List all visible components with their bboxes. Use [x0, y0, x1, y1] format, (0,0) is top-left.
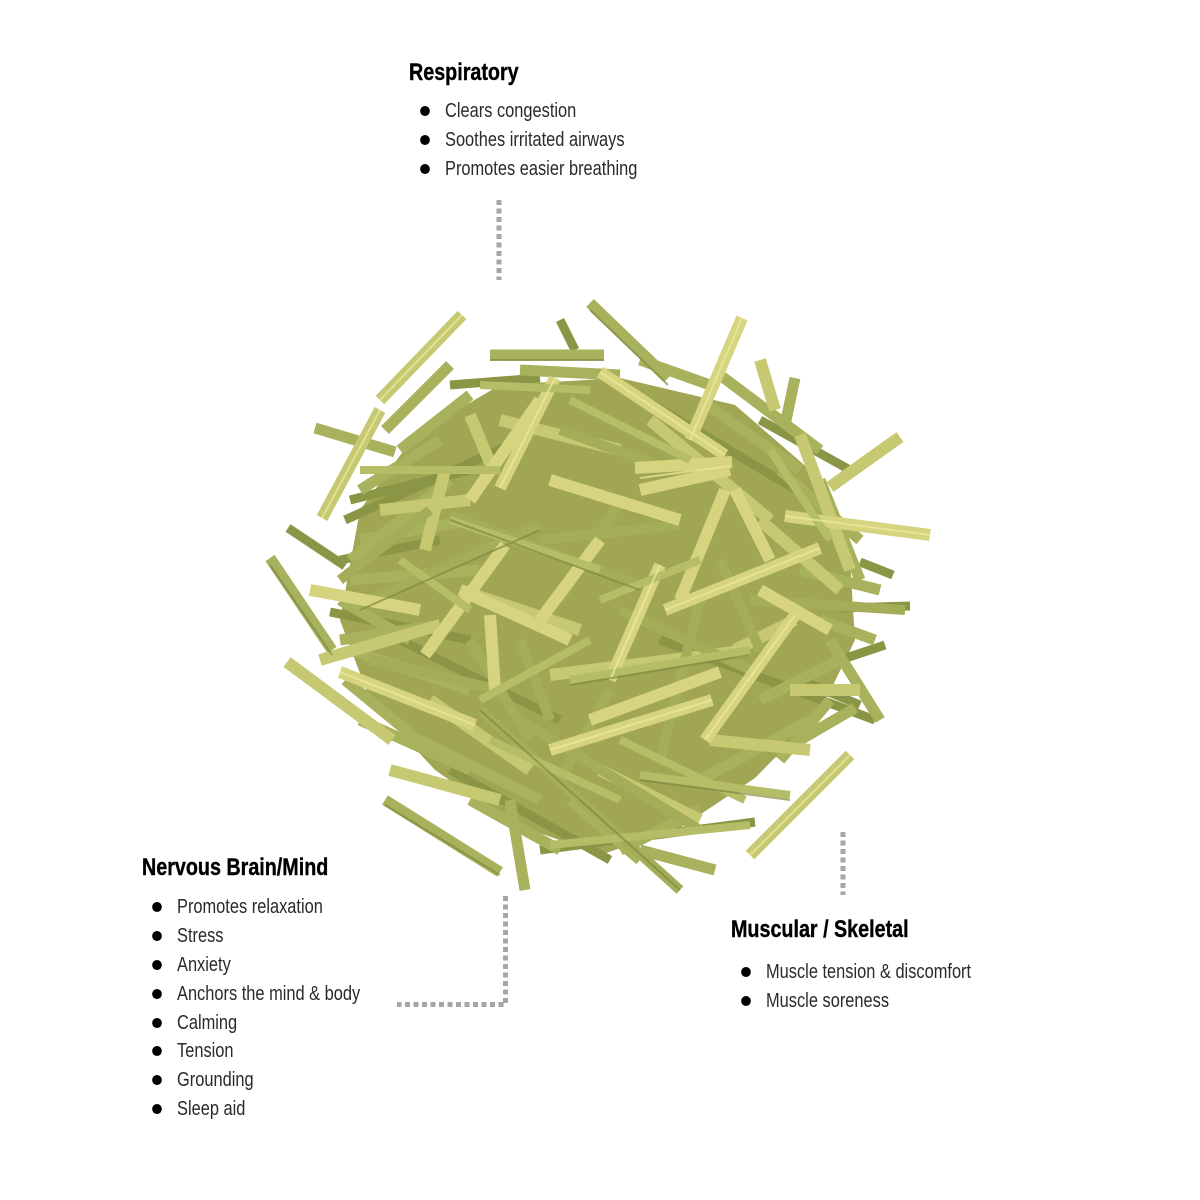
- list: muscular / skeletal: Muscle soreness: [766, 989, 889, 1012]
- panel: nervous brain/mind: [142, 854, 360, 1120]
- list: nervous brain/mind: Grounding: [177, 1068, 254, 1091]
- list: nervous brain/mind: Sleep aid: [177, 1097, 245, 1120]
- list: nervous brain/mind: [152, 895, 360, 1120]
- list: respiratory: [420, 99, 637, 180]
- list: nervous brain/mind: Calming: [177, 1011, 237, 1034]
- list: respiratory: Soothes irritated airways: [445, 128, 625, 151]
- heading: nervous brain/mind: Nervous Brain/Mind: [142, 854, 328, 881]
- list: nervous brain/mind: Tension: [177, 1039, 234, 1062]
- heading: muscular / skeletal: Muscular / Skeletal: [731, 916, 909, 943]
- list: muscular / skeletal: Muscle tension & discomfort: [766, 960, 971, 983]
- panel: respiratory: [409, 59, 637, 180]
- list: respiratory: Clears congestion: [445, 99, 576, 122]
- heading: respiratory: Respiratory: [409, 59, 519, 86]
- panel: muscular / skeletal: [731, 916, 971, 1012]
- list: nervous brain/mind: Promotes relaxation: [177, 895, 323, 918]
- list: respiratory: Promotes easier breathing: [445, 157, 637, 180]
- list: nervous brain/mind: Anxiety: [177, 953, 231, 976]
- list: nervous brain/mind: Stress: [177, 924, 223, 947]
- list: muscular / skeletal: [741, 960, 971, 1012]
- list: nervous brain/mind: Anchors the mind & body: [177, 982, 360, 1005]
